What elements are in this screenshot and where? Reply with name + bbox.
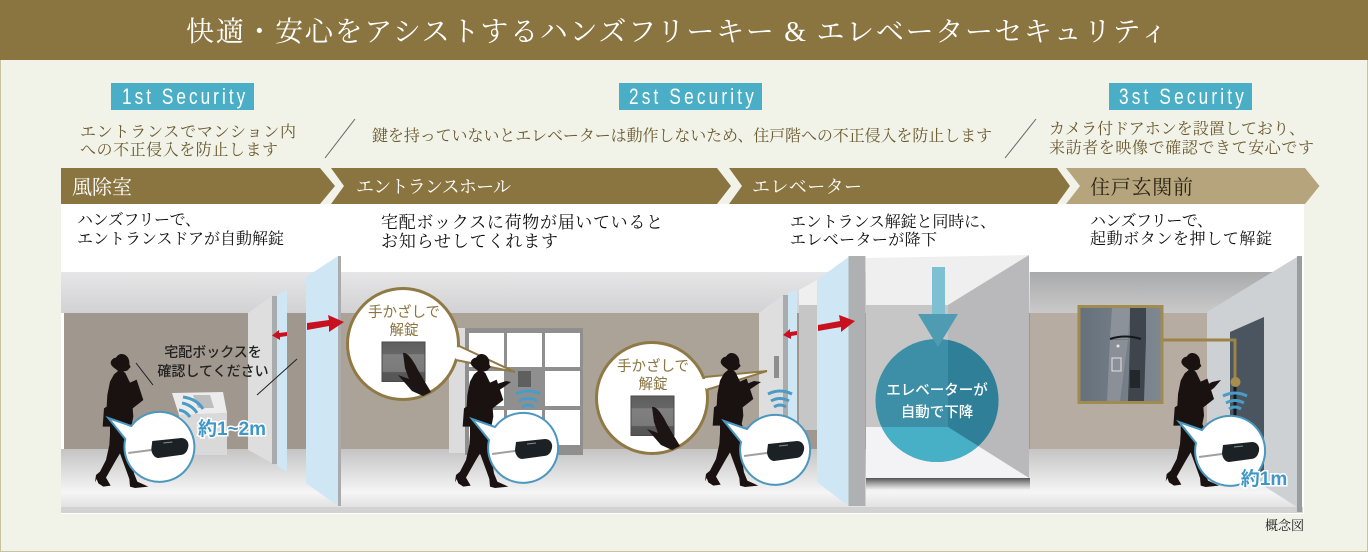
ribbon: 住戸玄関前: 住戸玄関前 [1090, 176, 1193, 199]
icon: key fob 3 [724, 415, 810, 485]
callout text: 宅配ボックス [157, 344, 269, 379]
text: エレベーター caption: エレベーターが降下 [790, 231, 937, 249]
label: 約1m: 約1m [1241, 468, 1287, 490]
text: 3st security description [1049, 120, 1314, 157]
person 3 [705, 353, 761, 487]
text: エントランスホール caption: 宅配ボックスに荷物が届いていると [381, 213, 663, 232]
entrance hall callout: 手かざしで [368, 303, 440, 321]
person 1 [95, 354, 148, 488]
glass door 2 [817, 256, 866, 506]
icon: signal waves 1 [179, 397, 203, 417]
label: 約1~2m: 約1~2m [198, 418, 266, 440]
ribbon: 風除室: 風除室 [72, 176, 132, 199]
callout text: 宅配ボックス: 確認してください [157, 363, 269, 379]
person 2 [455, 354, 511, 488]
connector: photo to door button [1163, 340, 1240, 416]
elevator callout: 手かざしで [617, 357, 689, 375]
circle: エレベーターが自動で下降: エレベーターが [886, 381, 988, 399]
text: 3st security description: カメラ付ドアホンを設置しており、 [1049, 120, 1305, 138]
circle: エレベーターが自動で下降 [876, 339, 998, 462]
icon: signal waves 2 [516, 391, 540, 407]
text: エントランスホール caption: お知らせしてくれます [381, 232, 558, 251]
elevator car [866, 255, 1030, 490]
icon: key fob 4 [1179, 416, 1265, 486]
ribbon: エレベーター [729, 168, 1070, 204]
text: 風除室 caption: ハンズフリーで、 [77, 211, 201, 229]
entrance hall callout [348, 288, 515, 400]
apartment door wall [1207, 256, 1302, 512]
elevator callout [596, 342, 767, 454]
badge: 1st Security: 1st Security [122, 85, 245, 110]
icon: key fob 2 [472, 413, 558, 483]
circle: エレベーターが自動で下降: 自動で下降 [901, 404, 974, 421]
ribbon: エントランスホール [331, 168, 731, 204]
person 4 [1166, 353, 1221, 487]
badge: 3st Security: 3st Security [1119, 85, 1244, 110]
arrow: small red 1 [272, 330, 287, 340]
icon: signal waves 4 [1223, 393, 1247, 409]
text: 1st security description [80, 123, 296, 159]
ribbon: 住戸玄関前 [1066, 168, 1320, 204]
icon: key fob 1 [108, 412, 194, 482]
text: 風除室 caption: エントランスドアが自動解錠 [77, 230, 284, 248]
elevator hall wall [759, 280, 817, 468]
text: 3st security description: 来訪者を映像で確認できて安心です [1049, 139, 1314, 157]
text: エレベーター caption: エントランス解錠と同時に、 [790, 213, 996, 231]
delivery lockers [449, 328, 583, 455]
ribbon: エレベーター: エレベーター [752, 177, 862, 197]
text: エントランスホール caption [381, 213, 663, 251]
arrow: small red 2 [783, 329, 797, 339]
text: 住戸玄関前 caption [1090, 212, 1272, 248]
callout text: 宅配ボックス: 宅配ボックスを [164, 344, 262, 360]
arrow: teal down [918, 267, 958, 347]
badge: 2st Security: 2st Security [629, 85, 754, 110]
delivery box [172, 392, 227, 455]
arrow: big red 1 [307, 315, 344, 332]
text: エレベーター caption [790, 213, 996, 249]
entrance door 1 [248, 290, 287, 472]
door handle photo [1079, 306, 1162, 402]
white panel [61, 204, 1304, 514]
text: 風除室 caption [77, 211, 284, 248]
text: 住戸玄関前 caption: 起動ボタンを押して解錠 [1090, 230, 1272, 248]
arrow: big red 2 [818, 315, 855, 332]
elevator callout: 解錠 [638, 376, 668, 393]
note: 概念図: 概念図 [1265, 518, 1304, 533]
text: 1st security description: エントランスでマンション内 [80, 123, 296, 141]
entrance hall callout: 解錠 [390, 322, 419, 339]
ribbon: 風除室 [61, 168, 335, 204]
ribbon: エントランスホール: エントランスホール [356, 177, 511, 197]
text: 1st security description: への不正侵入を防止します [80, 140, 278, 159]
glass door 1 [306, 256, 341, 506]
scene: building interior [61, 255, 1303, 513]
text: 住戸玄関前 caption: ハンズフリーで、 [1090, 212, 1213, 230]
icon: signal waves 3 [768, 391, 792, 407]
text: 2st security description: 鍵を持っていないとエレベーターは動作しないため、住戸階への不正侵入を防止します [372, 126, 992, 145]
title band: 快適・安心をアシストするハンズフリーキー & エレベーターセキュリティ [186, 16, 1168, 48]
title band [0, 0, 1368, 60]
